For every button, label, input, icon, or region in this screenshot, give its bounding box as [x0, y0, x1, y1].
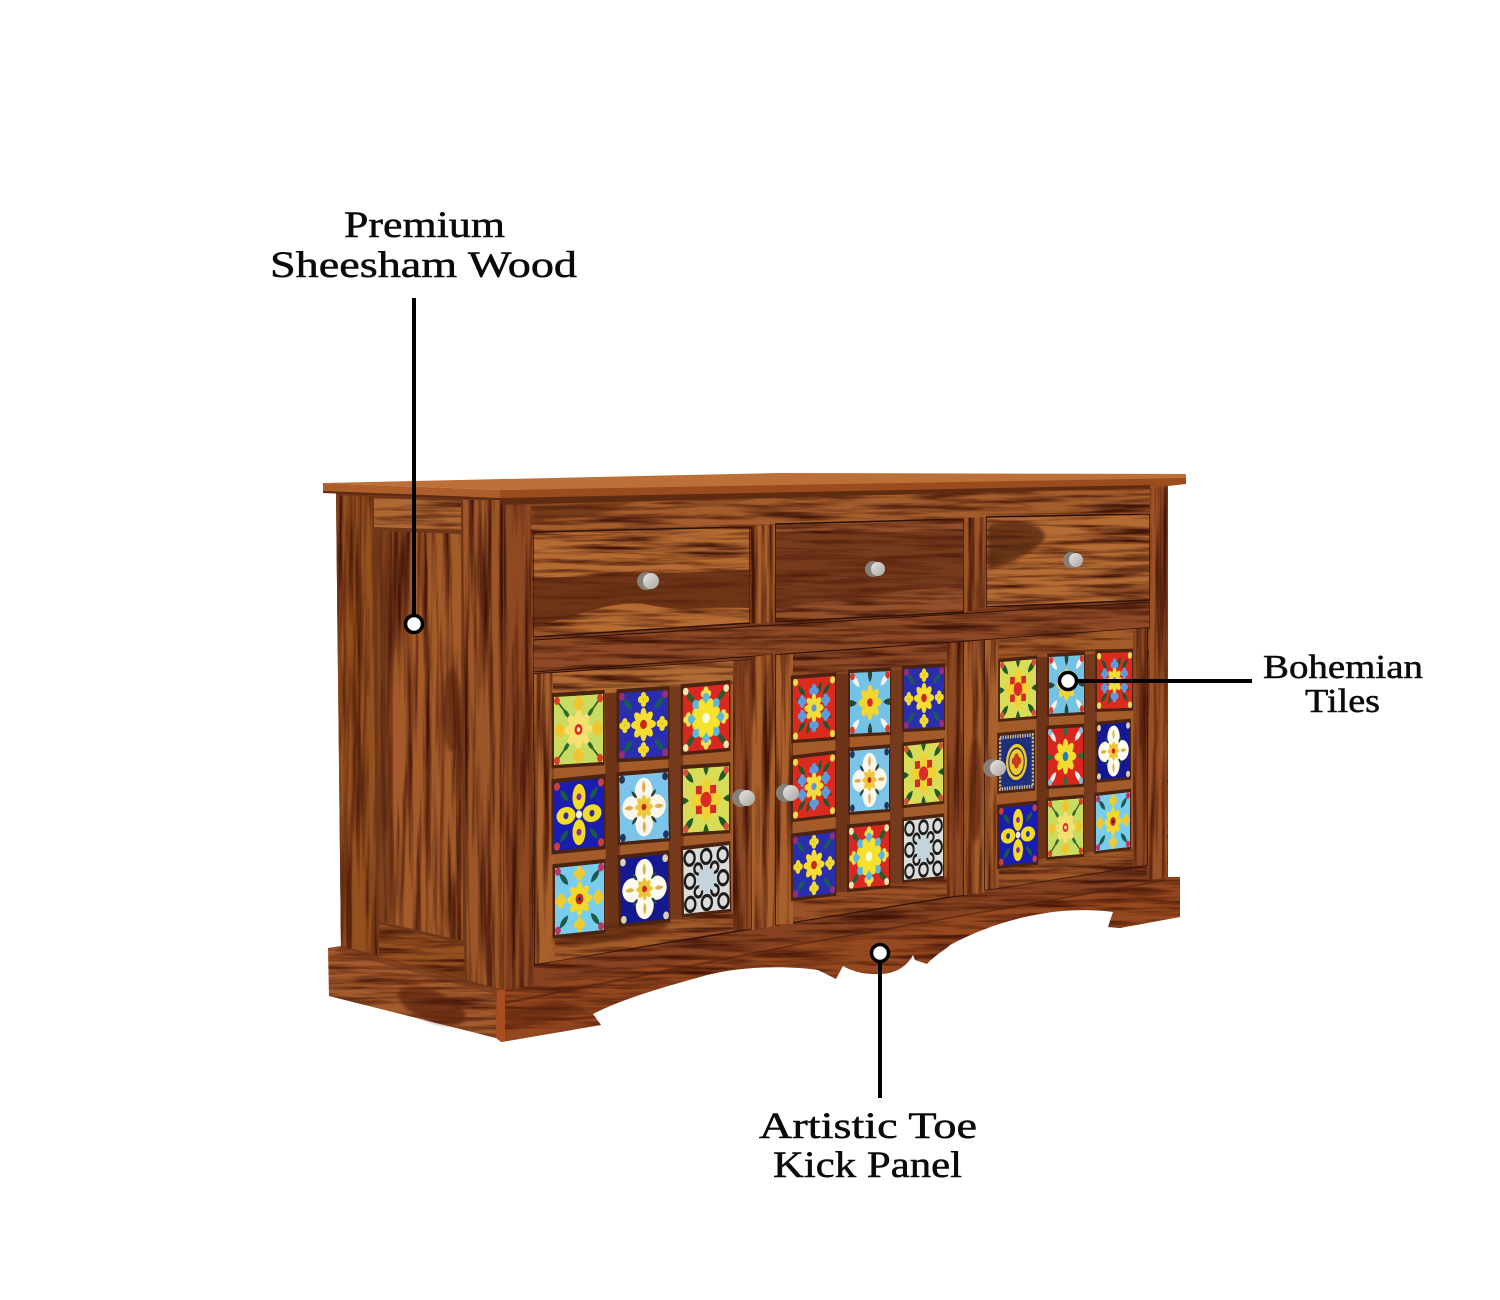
mid rail	[533, 602, 1150, 672]
carcass: side panel	[377, 531, 463, 941]
carcass: base silhouette behind side	[336, 493, 534, 990]
door stiles and muntins	[534, 660, 751, 964]
sideboard illustration	[323, 473, 1186, 1042]
callout: premium sheesham wood	[270, 205, 578, 632]
carcass: upper drawer rail	[531, 489, 1150, 532]
door: left	[534, 660, 751, 964]
door stiles and muntins	[776, 642, 963, 925]
tile grid	[552, 680, 739, 939]
top board	[323, 473, 1186, 505]
callout: artistic toe kick panel	[759, 944, 977, 1186]
marker dot	[406, 616, 422, 632]
carcass: right post	[1147, 485, 1168, 880]
leader line	[412, 298, 416, 624]
label text: Premium	[344, 205, 505, 246]
knobs	[637, 552, 1083, 807]
label text: Bohemian	[1263, 649, 1423, 686]
leader line	[1068, 679, 1252, 683]
door stiles and muntins	[985, 628, 1147, 890]
door: middle	[776, 642, 963, 925]
carcass: side bottom rail	[379, 924, 465, 979]
drawer: right	[986, 514, 1150, 607]
drawer: left	[533, 527, 750, 637]
tile grid	[992, 646, 1136, 869]
door: right	[985, 628, 1147, 890]
tile grid	[789, 663, 951, 901]
label text: Tiles	[1305, 683, 1380, 720]
carcass: front corner leg	[504, 500, 534, 990]
drawer dividers	[751, 517, 986, 624]
marker dot	[872, 944, 888, 962]
label text: Kick Panel	[773, 1145, 962, 1186]
label text: Sheesham Wood	[270, 245, 578, 286]
carcass: side top rail	[374, 498, 461, 530]
drawer: middle	[775, 519, 964, 622]
label text: Artistic Toe	[759, 1106, 977, 1147]
marker dot	[1060, 672, 1076, 690]
plinth: front toe kick panel with scalloped edge	[496, 877, 1180, 1042]
leader line	[878, 953, 882, 1098]
post between doors 2 and 3	[964, 640, 985, 895]
carcass: corner leg side	[463, 500, 503, 990]
callout: bohemian tiles	[1060, 649, 1423, 720]
post between doors 1 and 2	[751, 654, 776, 930]
carcass: left side leg	[336, 495, 377, 955]
carcass: front body	[532, 485, 1168, 988]
plinth: side face	[328, 946, 498, 1038]
